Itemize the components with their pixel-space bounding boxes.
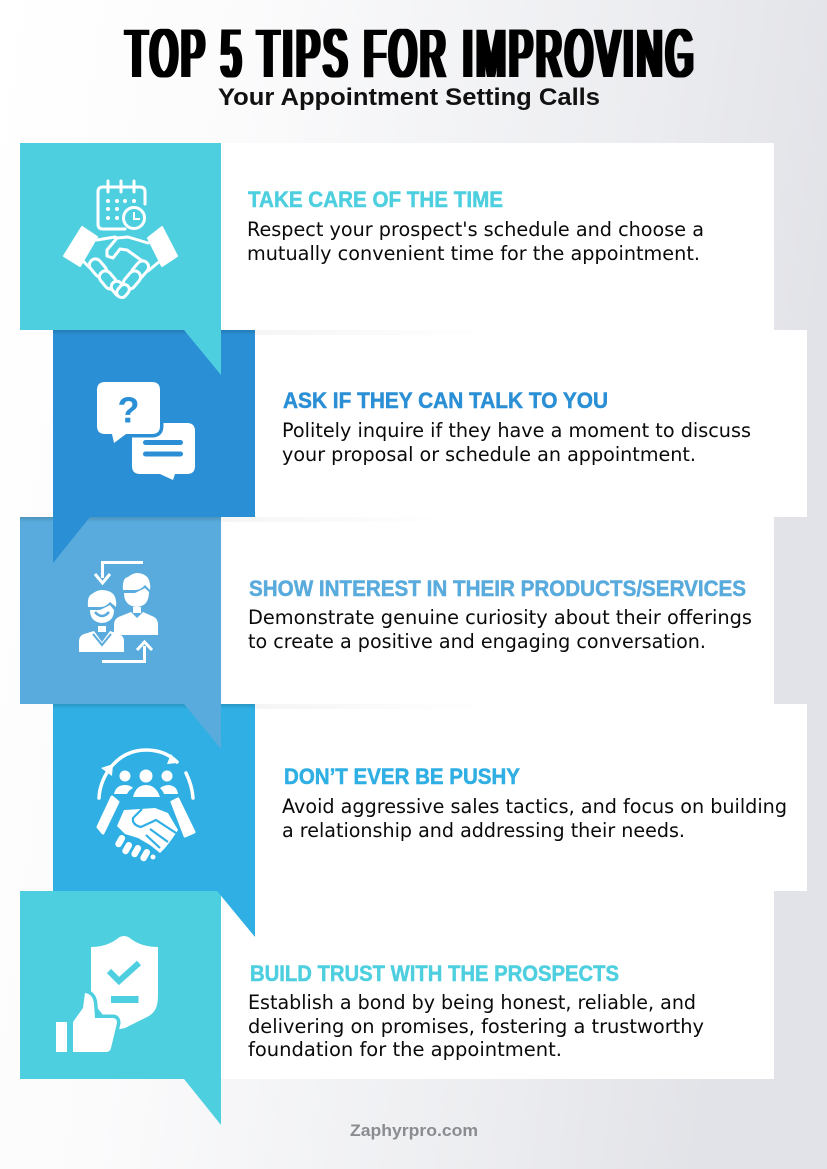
- text: tip 3: to create a positive and engaging conversation.: [248, 630, 706, 653]
- text: tip 1: Respect your prospect's schedule and choose a: [247, 218, 704, 241]
- icon: calendar handshake: [64, 181, 177, 300]
- text: tip 5: delivering on promises, fostering a trustworthy: [248, 1015, 704, 1038]
- text: tip 3: [248, 576, 752, 653]
- icon: team handshake: [98, 750, 194, 862]
- panel: tip 4: [53, 704, 807, 937]
- text: tip 4: Avoid aggressive sales tactics, and focus on building: [282, 795, 787, 818]
- text: tip 1: TAKE CARE OF THE TIME: [248, 187, 503, 212]
- text: tip 5: BUILD TRUST WITH THE PROSPECTS: [250, 961, 619, 986]
- text: tip 1: mutually convenient time for the appointment.: [247, 242, 700, 265]
- text: tip 4: a relationship and addressing their needs.: [282, 819, 685, 842]
- icon: speech bubbles: [97, 382, 195, 480]
- panel: tip 5: [20, 891, 774, 1125]
- text: tip 4: DON’T EVER BE PUSHY: [284, 764, 520, 789]
- text: tip 5: [248, 961, 704, 1061]
- subtitle: Your Appointment Setting Calls: [218, 84, 600, 111]
- panel: tip 1: [20, 143, 774, 375]
- icon: two people exchange: [79, 562, 158, 662]
- panel: tip 3: [20, 517, 774, 749]
- icon: speech bubbles: ?: [118, 390, 140, 430]
- text: tip 2: Politely inquire if they have a moment to discuss: [282, 419, 751, 442]
- text: tip 5: foundation for the appointment.: [248, 1038, 562, 1061]
- panel: tip 2: [53, 330, 807, 563]
- text: tip 2: [282, 388, 751, 466]
- icon: shield and thumbs up: [56, 936, 158, 1052]
- footer: Zaphyrpro.com: [350, 1121, 478, 1140]
- text: tip 2: your proposal or schedule an appointment.: [282, 443, 696, 466]
- text: tip 5: Establish a bond by being honest, reliable, and: [248, 991, 696, 1014]
- text: tip 4: [282, 764, 787, 842]
- text: tip 2: ASK IF THEY CAN TALK TO YOU: [283, 388, 608, 413]
- text: tip 3: Demonstrate genuine curiosity about their offerings: [248, 606, 752, 629]
- text: tip 3: SHOW INTEREST IN THEIR PRODUCTS/SERVICES: [249, 576, 746, 601]
- text: tip 1: [247, 187, 704, 265]
